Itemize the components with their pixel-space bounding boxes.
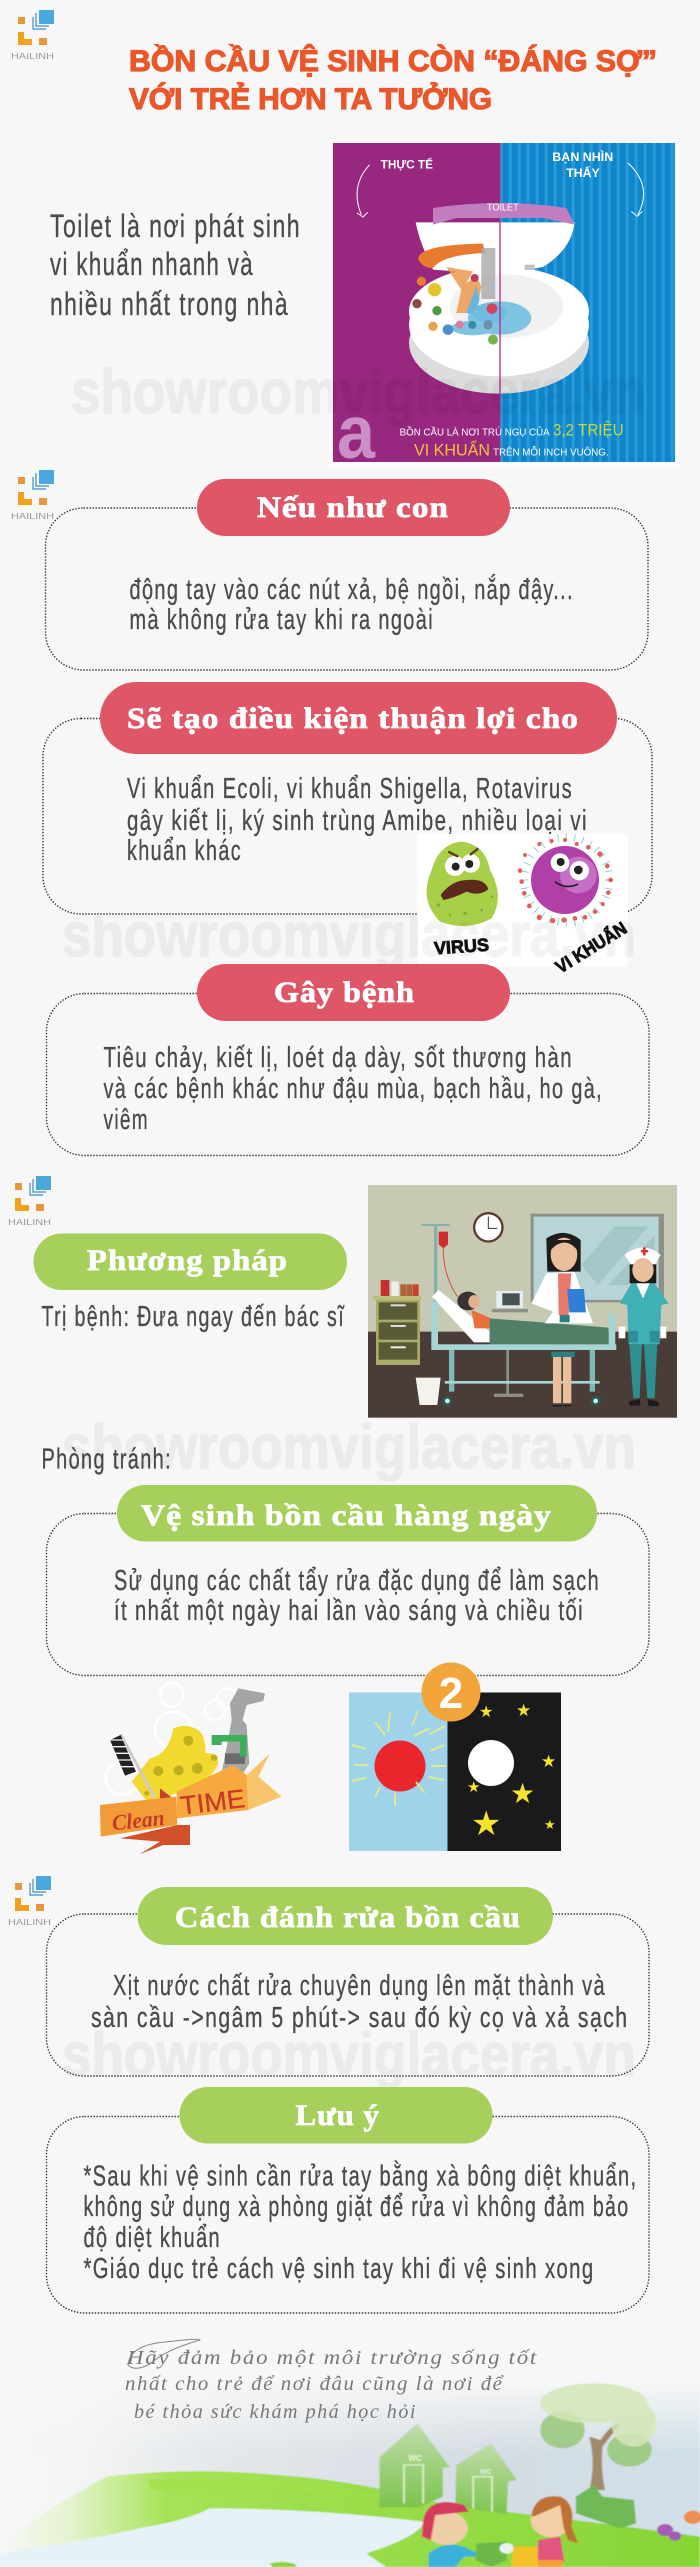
intro text [50, 208, 301, 322]
heading pill [117, 1485, 597, 1542]
panel text [130, 573, 574, 636]
illustration: clean time [100, 1683, 282, 1854]
logo: Hailinh second [11, 470, 54, 521]
logo: Hailinh third: HAILINH [8, 1218, 51, 1227]
title: BỒN CẦU VỆ SINH CÒN “ĐÁNG SỢ” [129, 44, 657, 78]
panel: Vệ sinh bồn cầu hàng ngày [46, 1485, 649, 1676]
logo: Hailinh fourth: HAILINH [8, 1918, 51, 1927]
illustration: twice a day, day and night: ★ [544, 1818, 556, 1833]
panel text: mà không rửa tay khi ra ngoài [130, 604, 434, 636]
logo: Hailinh top: HAILINH [11, 52, 54, 61]
intro text: nhiều nhất trong nhà [50, 286, 289, 322]
panel text [91, 1970, 628, 2034]
section: Phương pháp pill: Phương pháp [87, 1244, 288, 1277]
illustration: children and green landscape: WC [480, 2467, 492, 2476]
logo: Hailinh third [8, 1176, 51, 1227]
heading pill [180, 2087, 492, 2144]
heading pill: Cách đánh rửa bồn cầu [175, 1901, 521, 1934]
illustration: twice a day, day and night: ★ [541, 1752, 556, 1772]
title [129, 44, 657, 116]
heading pill: Vệ sinh bồn cầu hàng ngày [141, 1499, 552, 1532]
illustration: clean time: Clean [111, 1805, 166, 1835]
badge: number 2 [422, 1662, 480, 1722]
heading pill [138, 1887, 553, 1945]
logo: Hailinh top [11, 10, 54, 61]
intro text: Toilet là nơi phát sinh [50, 208, 301, 244]
title: VỚI TRẺ HƠN TA TƯỞNG [129, 82, 492, 116]
illustration: toilet comparison [329, 139, 679, 474]
heading pill [197, 964, 510, 1021]
closing message: bé thỏa sức khám phá học hỏi [134, 2401, 417, 2423]
panel text: khuẩn khác [127, 835, 242, 867]
panel: Nếu như con [46, 479, 648, 670]
illustration: twice a day, day and night: ★ [516, 1701, 531, 1721]
illustration: toilet comparison: TRÊN MỖI INCH VUÔNG. [493, 446, 609, 459]
illustration: virus and bacteria [417, 834, 630, 977]
illustration: toilet comparison: 3,2 TRIỆU [553, 421, 624, 440]
illustration: virus and bacteria: VIRUS [433, 935, 490, 958]
heading pill [197, 479, 510, 536]
illustration: toilet comparison: BỒN CẦU LÀ NƠI TRÚ NGỤ CỦA [400, 426, 550, 439]
illustration: clean time: TIME [178, 1783, 247, 1821]
logo: Hailinh fourth [8, 1876, 51, 1927]
heading pill: Gây bệnh [274, 976, 415, 1009]
illustration: toilet comparison: THẤY [566, 165, 600, 180]
illustration: children and green landscape [0, 2380, 700, 2567]
text: Phòng tránh: Phòng tránh: [42, 1444, 172, 1476]
heading pill: Sẽ tạo điều kiện thuận lợi cho [127, 702, 579, 735]
illustration: toilet comparison: a [337, 390, 376, 474]
panel text [127, 773, 588, 867]
panel text: viêm [104, 1104, 149, 1136]
badge: number 2: 2 [439, 1669, 463, 1718]
panel: Cách đánh rửa bồn cầu [46, 1887, 649, 2076]
closing message: nhất cho trẻ để nơi đâu cũng là nơi để [125, 2373, 504, 2395]
panel text [114, 1565, 600, 1627]
illustration: toilet comparison: TOILET [487, 203, 519, 214]
heading pill: Lưu ý [296, 2099, 380, 2132]
illustration: children and green landscape: WC [408, 2454, 422, 2464]
panel: Sẽ tạo điều kiện thuận lợi cho [43, 682, 652, 914]
closing message: Hãy đảm bảo một môi trường sống tốt [126, 2347, 538, 2369]
panel: Lưu ý [46, 2087, 649, 2313]
illustration: twice a day, day and night [349, 1662, 561, 1851]
text: Trị bệnh: Trị bệnh: Đưa ngay đến bác sĩ [42, 1301, 345, 1333]
intro text: vi khuẩn nhanh và [50, 246, 254, 282]
section: Phương pháp pill [34, 1234, 347, 1290]
illustration: twice a day, day and night: ★ [479, 1702, 493, 1721]
illustration: toilet comparison: VI KHUẨN [414, 441, 490, 460]
heading pill [100, 682, 617, 754]
illustration: toilet comparison: BẠN NHÌN [552, 149, 613, 164]
heading pill: Nếu như con [257, 491, 449, 524]
illustration: twice a day, day and night: ★ [467, 1778, 480, 1796]
panel text: độ diệt khuẩn [84, 2222, 221, 2254]
illustration: twice a day, day and night: ★ [510, 1777, 535, 1810]
closing message [125, 2339, 538, 2423]
panel text [104, 1042, 603, 1136]
illustration: virus and bacteria: VI KHUẨN [551, 917, 630, 977]
logo: Hailinh second: HAILINH [11, 512, 54, 521]
illustration: toilet comparison: THỰC TẾ [381, 156, 433, 171]
panel: Gây bệnh [46, 964, 649, 1156]
illustration: twice a day, day and night: ★ [471, 1804, 501, 1844]
panel text [84, 2160, 638, 2285]
illustration: hospital room [368, 1185, 677, 1418]
